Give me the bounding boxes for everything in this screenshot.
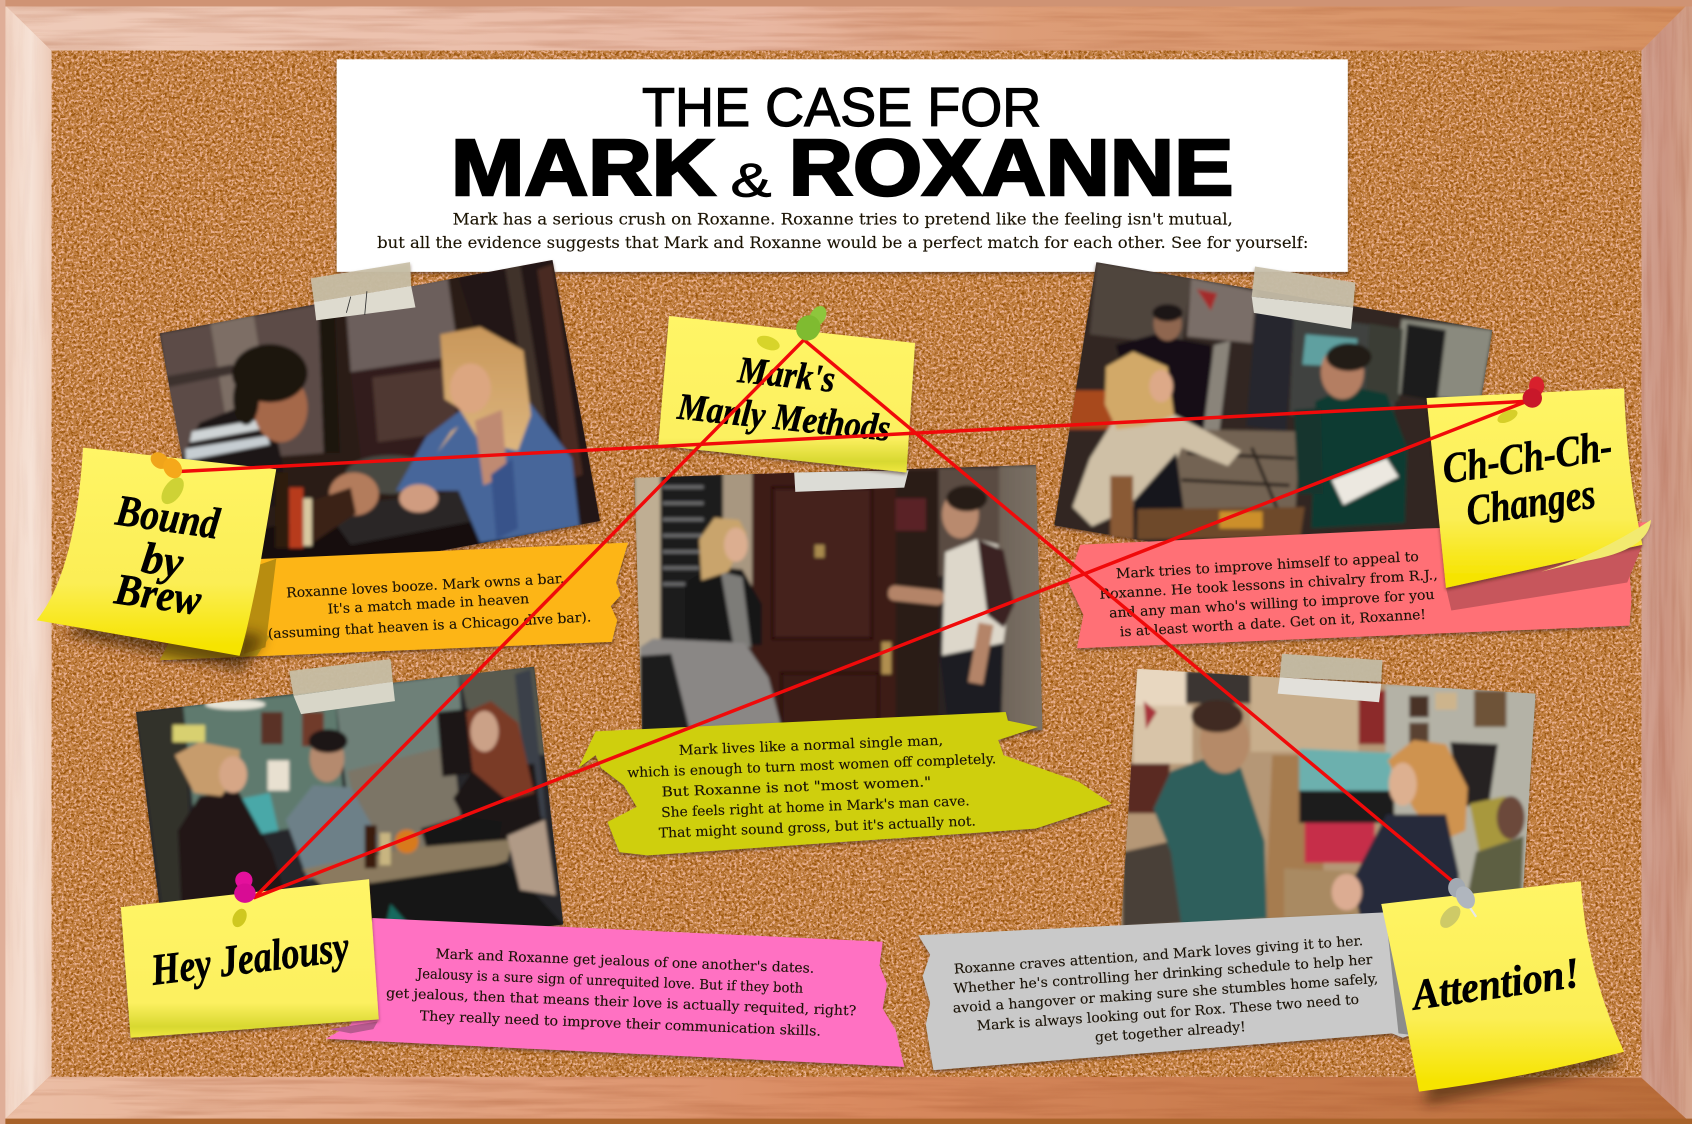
green strip text: She feels right at home in Mark's man cave. [661, 793, 970, 821]
photo: Roxanne and Mark at the door [631, 462, 1047, 734]
title line 2: ROXANNE [789, 123, 1233, 212]
intro text [377, 209, 1308, 252]
sticky title [1440, 423, 1615, 535]
pink strip text: get jealous, then that means their love is actually requited, right? [386, 985, 857, 1019]
tape [1252, 266, 1355, 329]
coral strip text: is at least worth a date. Get on it, Roxanne! [1119, 607, 1426, 640]
sticky title: Mark's [735, 349, 837, 401]
sticky note: Mark's Manly Methods [658, 316, 915, 472]
intro text: but all the evidence suggests that Mark and Roxanne would be a perfect match for each other. See for yourself: [377, 233, 1308, 252]
intro text: Mark has a serious crush on Roxanne. Roxanne tries to pretend like the feeling isn't mutual, [453, 209, 1233, 228]
title line 2: MARK [451, 123, 715, 212]
orange strip text: Roxanne loves booze. Mark owns a bar. [286, 571, 565, 601]
sticky note: Bound by Brew [37, 448, 276, 671]
green strip text [626, 731, 999, 843]
sticky note: Hey Jealousy [121, 879, 379, 1038]
pin: orange [147, 449, 188, 508]
title line 2: & [731, 154, 772, 207]
orange strip text: It's a match made in heaven [327, 591, 530, 618]
grey strip text: avoid a hangover or making sure she stumbles home safely, [952, 971, 1379, 1017]
note: grey strip [918, 911, 1424, 1070]
pin: silver [1436, 878, 1479, 932]
sticky title: Brew [111, 564, 205, 625]
note: pink strip [326, 918, 904, 1067]
tape [289, 659, 395, 714]
photo: Mark and Roxanne at the jukebox [1119, 654, 1538, 926]
red strings [181, 340, 1527, 897]
sticky title: Ch-Ch-Ch- [1440, 423, 1615, 493]
green strip text: That might sound gross, but it's actually not. [659, 814, 976, 842]
sticky title: Changes [1463, 471, 1598, 535]
coral strip text: Mark tries to improve himself to appeal to [1116, 549, 1419, 582]
green strip text: Mark lives like a normal single man, [679, 733, 943, 759]
sticky title: by [139, 533, 187, 587]
header panel [337, 59, 1348, 272]
pin: green [755, 303, 830, 353]
green strip text: which is enough to turn most women off completely. [627, 751, 996, 781]
sticky title [111, 486, 223, 625]
pin: magenta [230, 872, 256, 930]
title line 1: THE CASE FOR [642, 76, 1041, 138]
grey strip text [950, 932, 1381, 1055]
grey strip text: Whether he's controlling her drinking schedule to help her [953, 952, 1374, 997]
pin: red [1495, 376, 1544, 426]
tape [1278, 654, 1382, 702]
note: orange strip [160, 543, 628, 660]
orange strip text [265, 570, 592, 642]
pink strip text [385, 944, 858, 1041]
photo: Roxanne and Mark with the chair [1052, 262, 1494, 542]
note: green strip [578, 712, 1111, 855]
pink strip text: They really need to improve their communication skills. [419, 1008, 821, 1040]
sticky title: Manly Methods [675, 386, 893, 450]
tape [311, 262, 415, 320]
sticky title: Hey Jealousy [148, 922, 352, 995]
coral strip text: Roxanne. He took lessons in chivalry from R.J., [1099, 567, 1438, 603]
pink strip text: Mark and Roxanne get jealous of one another's dates. [435, 946, 814, 977]
sticky note: Attention! [1381, 881, 1624, 1105]
photo: Mark and Roxanne at the bar [158, 260, 602, 559]
note: coral strip [1068, 522, 1651, 648]
coral strip text: and any man who's willing to improve for you [1109, 587, 1435, 622]
grey strip text: Mark is always looking out for Rox. These two need to [976, 992, 1360, 1034]
sticky title [675, 349, 893, 450]
sticky title: Attention! [1407, 950, 1583, 1020]
grey strip text: get together already! [1094, 1019, 1246, 1046]
grey strip text: Roxanne craves attention, and Mark loves giving it to her. [953, 933, 1364, 978]
green strip text: But Roxanne is not "most women." [661, 774, 931, 801]
coral strip text [1098, 548, 1440, 641]
pink strip text: Jealousy is a sure sign of unrequited love. But if they both [415, 966, 804, 997]
sticky title: Bound [112, 486, 223, 549]
sticky note: Ch-Ch-Ch-Changes [1427, 388, 1651, 588]
photo: bar table with friends [134, 659, 565, 927]
tape [794, 470, 909, 492]
orange strip text: (assuming that heaven is a Chicago dive bar). [267, 609, 592, 642]
title line 2 [451, 123, 1233, 212]
